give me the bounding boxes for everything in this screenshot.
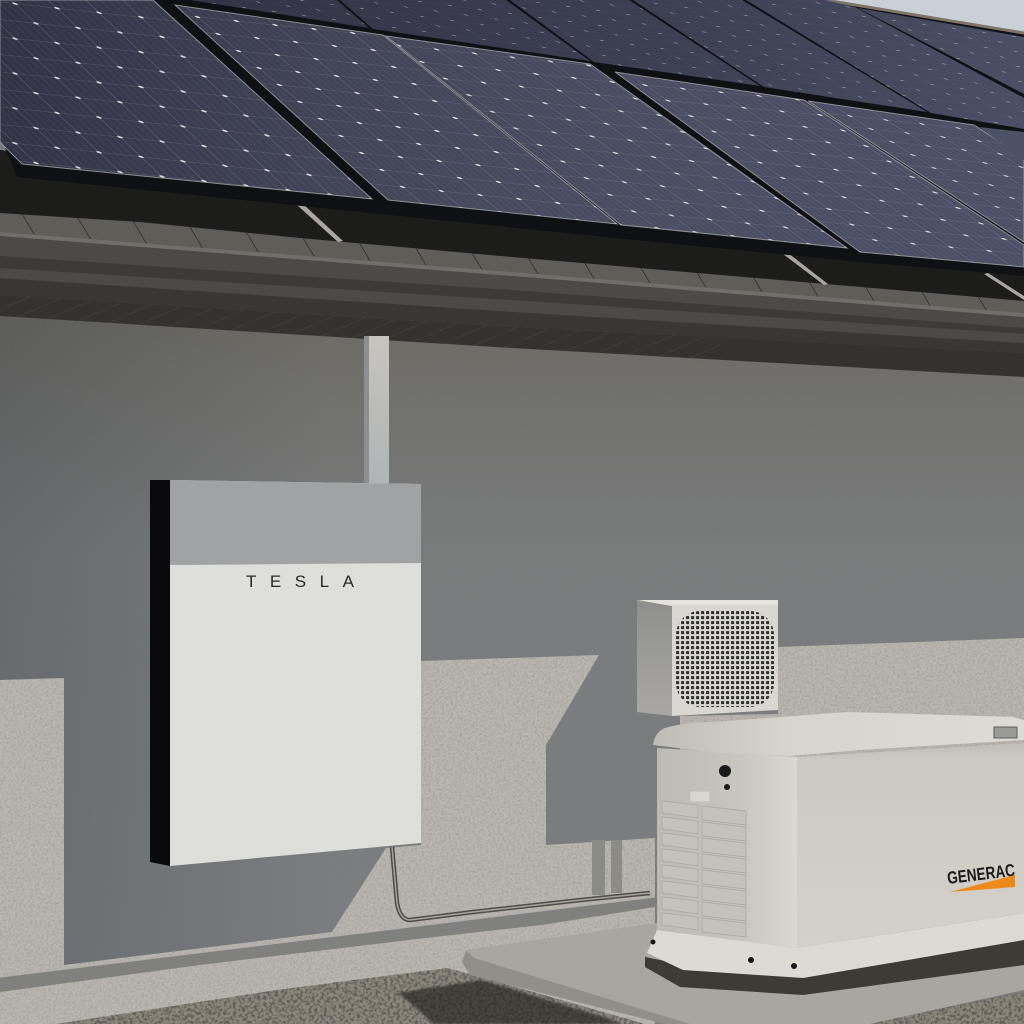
air conditioner unit — [637, 600, 778, 716]
back row panels — [190, 0, 1024, 129]
ledge shadow — [0, 897, 655, 992]
front panel 1 — [0, 0, 372, 199]
base screws — [650, 940, 797, 969]
battery front — [170, 480, 421, 866]
ground gravel — [56, 968, 1024, 1024]
shadow on gravel — [399, 980, 620, 1024]
shadows of AC mounts — [592, 840, 622, 895]
generator base skirt — [645, 938, 1024, 995]
sky — [800, 0, 1024, 50]
top badge — [994, 727, 1017, 738]
soffit — [0, 295, 1024, 377]
downspout — [364, 336, 389, 484]
gutter — [0, 232, 1024, 353]
roof shingles — [0, 150, 1024, 316]
conduit cables — [392, 847, 650, 920]
generator door — [797, 743, 1024, 948]
panel mount brackets — [297, 204, 1024, 300]
TESLA logo: TESLA — [246, 572, 355, 591]
front panel 4 — [615, 72, 1024, 267]
generator lid — [653, 712, 1024, 756]
front panel 5 — [808, 101, 1024, 242]
generator — [645, 712, 1024, 995]
small label — [690, 791, 710, 802]
front panel 6 — [979, 127, 1024, 160]
sunlit wall areas — [0, 630, 1024, 1024]
generator side — [657, 748, 797, 948]
fan grille — [676, 611, 774, 707]
battery side — [150, 480, 170, 866]
shaded top of battery — [170, 480, 421, 565]
front panel 2 — [175, 5, 617, 224]
solar panel array — [0, 0, 1024, 276]
wall — [0, 300, 1024, 1024]
status button — [719, 765, 731, 790]
vents — [662, 801, 746, 937]
front panel 3 — [386, 36, 847, 248]
generator base — [647, 913, 1024, 978]
roof ridge edge — [825, 0, 1024, 33]
wall battery — [150, 480, 421, 866]
concrete pad — [462, 923, 1024, 1024]
